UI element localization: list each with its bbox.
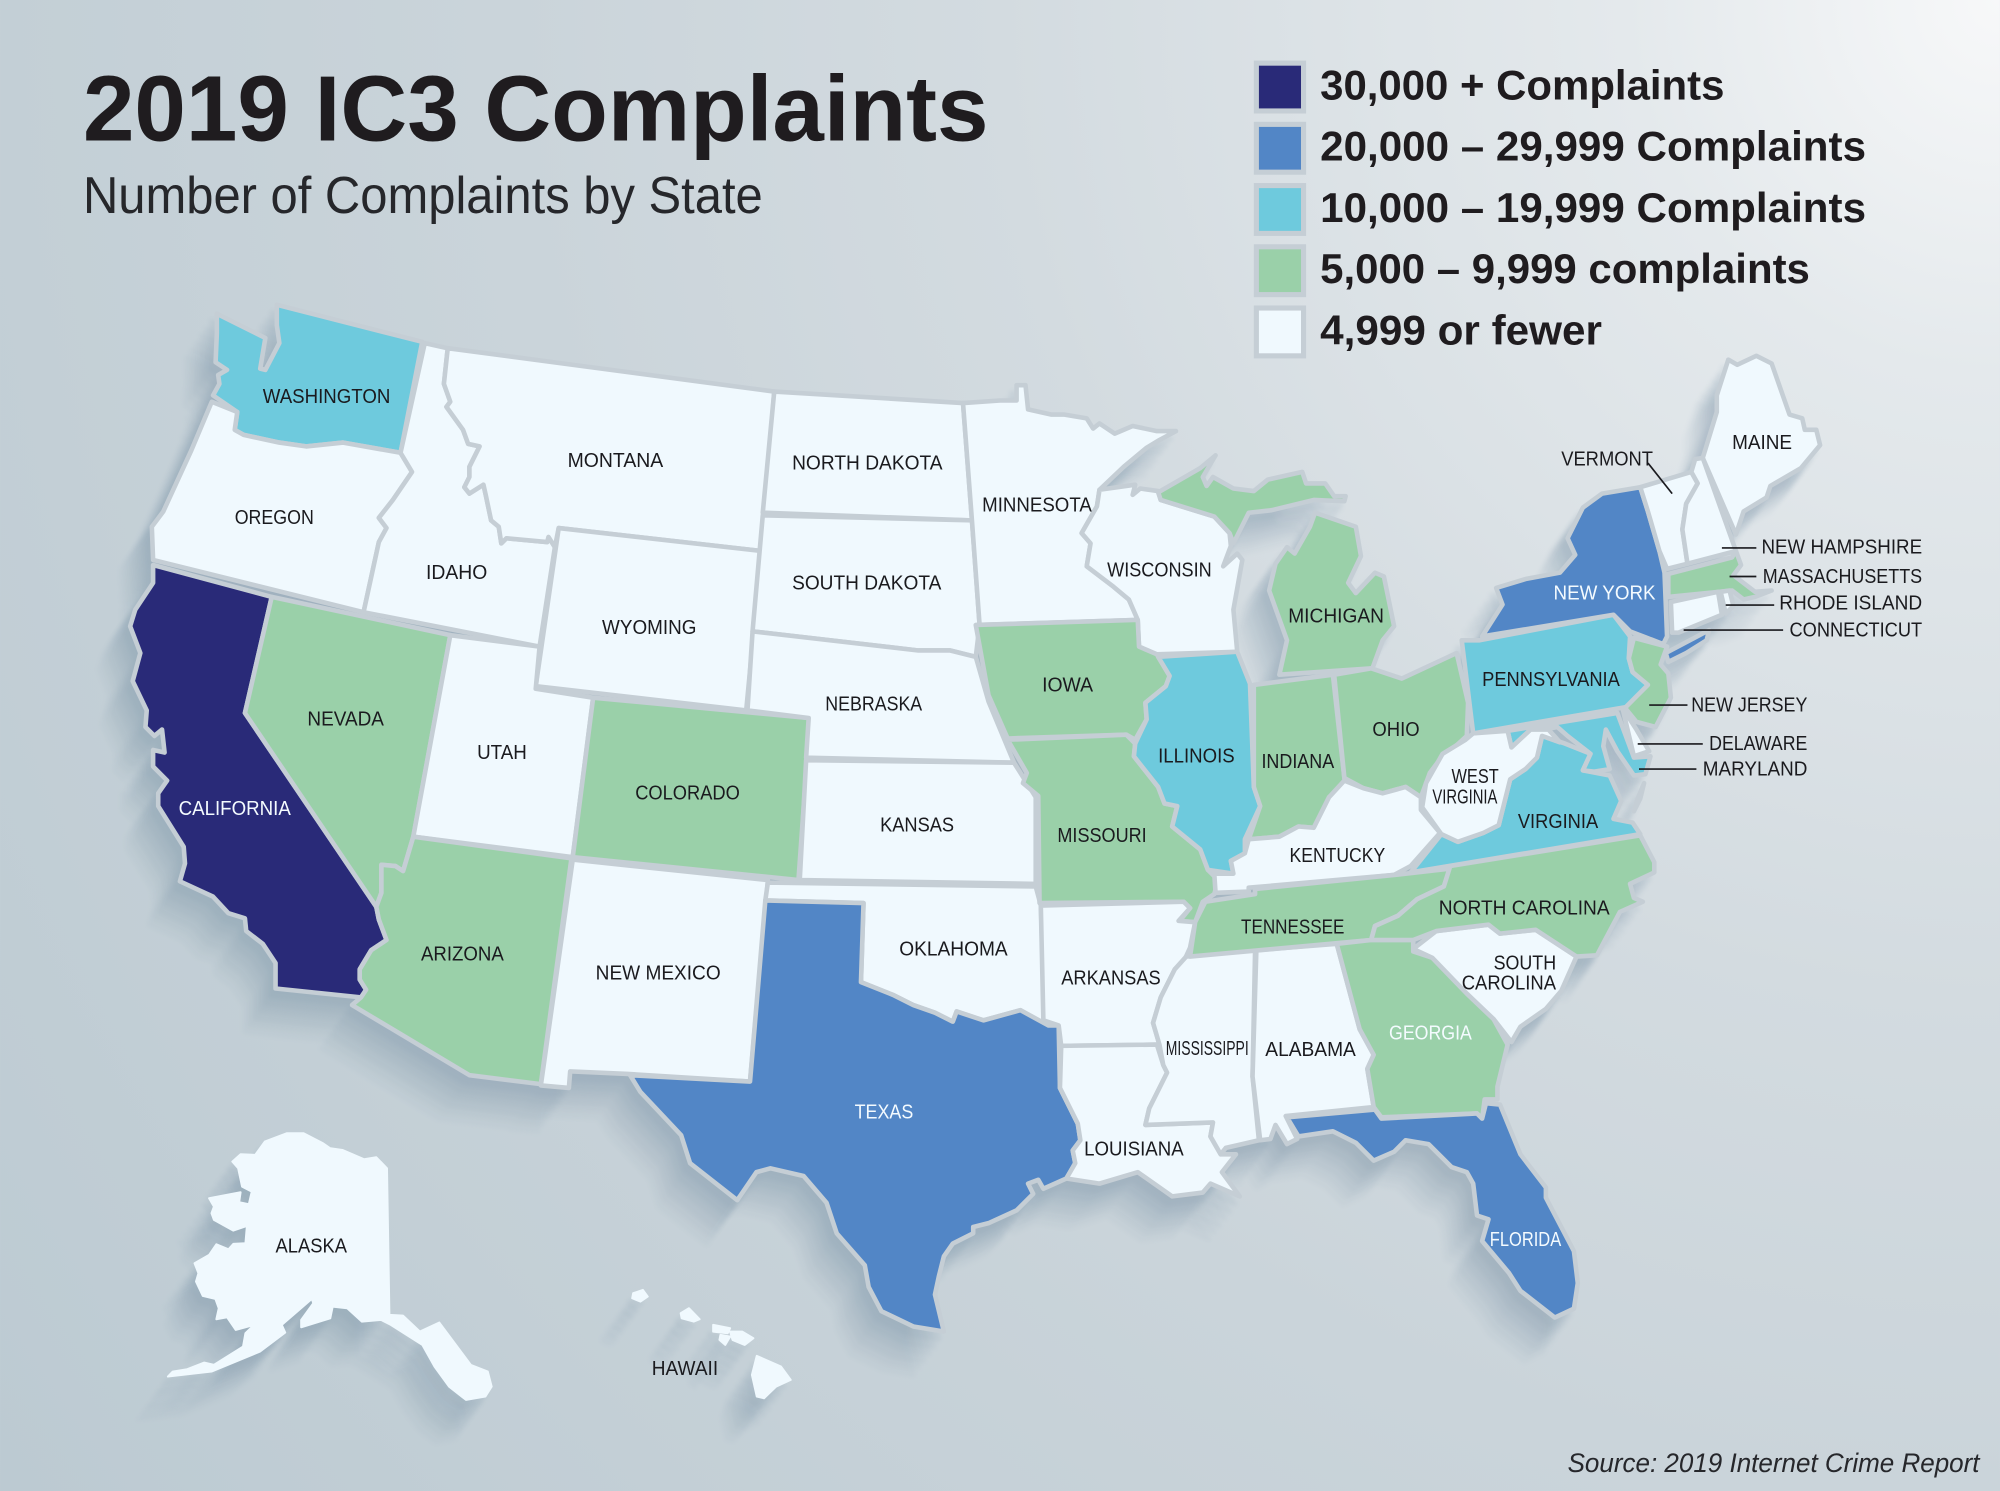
state name labels: VIRGINIA	[1518, 811, 1599, 833]
state: Delaware	[1622, 708, 1649, 756]
state: Pennsylvania	[1462, 615, 1648, 733]
state name labels: DELAWARE	[1709, 733, 1807, 755]
state: South Carolina	[1413, 925, 1577, 1042]
state: North Carolina	[1371, 835, 1654, 957]
state name labels: VERMONT	[1561, 449, 1653, 471]
state name labels: WEST	[1452, 766, 1499, 788]
state: Ohio	[1334, 653, 1468, 797]
state: Wisconsin	[1082, 485, 1242, 654]
state name labels: SOUTH	[1494, 952, 1556, 974]
legend label: 5,000-9,999: 5,000 – 9,999 complaints	[1320, 245, 1810, 292]
state: Virginia eastern shore	[1634, 783, 1644, 811]
state: Maine	[1703, 356, 1820, 534]
state: New Jersey	[1625, 638, 1671, 727]
subtitle: Number of Complaints by State	[83, 167, 763, 225]
state: Nebraska	[747, 631, 1014, 763]
state name labels: COLORADO	[635, 783, 740, 805]
state name labels: TEXAS	[855, 1102, 913, 1124]
state name labels	[179, 386, 1922, 1380]
state name labels: KANSAS	[880, 815, 954, 837]
contiguous states	[130, 305, 1820, 1332]
legend swatch: 10,000-19,999	[1256, 186, 1304, 233]
leader lines for northeast states	[1638, 463, 1783, 769]
legend label: 30,000+: 30,000 + Complaints	[1320, 61, 1724, 108]
legend	[1256, 61, 1866, 356]
state name labels: MINNESOTA	[982, 494, 1092, 516]
state: Texas	[630, 900, 1080, 1332]
state name labels: TENNESSEE	[1241, 917, 1344, 939]
state: Alaska	[168, 1133, 492, 1400]
state name labels: MICHIGAN	[1288, 605, 1384, 627]
state: West Virginia	[1422, 730, 1560, 842]
state name labels: OREGON	[235, 507, 314, 529]
state: Iowa	[976, 620, 1170, 740]
state: Michigan lower peninsula	[1269, 513, 1394, 675]
source note: Source: 2019 Internet Crime Report	[1568, 1448, 1981, 1478]
state name labels: MASSACHUSETTS	[1763, 566, 1922, 588]
state name labels: MISSOURI	[1057, 825, 1147, 847]
state name labels: CONNECTICUT	[1790, 619, 1922, 641]
state name labels: NEW MEXICO	[596, 963, 721, 985]
state: Massachusetts	[1668, 551, 1772, 599]
state: Kentucky	[1214, 781, 1440, 893]
state: South Dakota	[753, 515, 980, 657]
state: New Mexico	[541, 860, 768, 1088]
state name labels: ARIZONA	[421, 943, 504, 965]
state name labels: OKLAHOMA	[899, 938, 1008, 960]
state name labels: ALASKA	[276, 1235, 347, 1257]
state name labels: ILLINOIS	[1158, 746, 1235, 768]
state name labels: PENNSYLVANIA	[1482, 669, 1620, 691]
state: Oregon	[152, 402, 412, 612]
state: Oklahoma	[765, 883, 1045, 1025]
state: New Hampshire	[1682, 458, 1736, 564]
state: Nevada	[245, 597, 450, 907]
state name labels: KENTUCKY	[1290, 845, 1386, 867]
title: 2019 IC3 Complaints	[83, 56, 989, 160]
state: New York, Long Island	[1666, 630, 1709, 662]
state name labels: WISCONSIN	[1107, 560, 1212, 582]
state: Utah	[413, 635, 593, 857]
state: Michigan upper peninsula	[1158, 455, 1346, 543]
state name labels: MISSISSIPPI	[1166, 1038, 1249, 1060]
state name labels: INDIANA	[1261, 751, 1335, 773]
state name labels: NEW HAMPSHIRE	[1761, 537, 1922, 559]
state: Missouri	[1008, 735, 1218, 922]
state name labels: UTAH	[477, 742, 527, 764]
legend swatch: 20,000-29,999	[1256, 124, 1304, 172]
state name labels: WYOMING	[602, 617, 696, 639]
state: Washington	[213, 305, 422, 453]
state name labels: CALIFORNIA	[179, 798, 291, 820]
legend swatch: 4,999 or fewer	[1256, 308, 1304, 356]
state: Wyoming	[536, 528, 761, 710]
state: Minnesota	[963, 385, 1176, 625]
state: Illinois	[1134, 652, 1260, 874]
legend label: 4,999 or fewer: 4,999 or fewer	[1320, 306, 1602, 353]
state name labels: MARYLAND	[1703, 758, 1807, 780]
state name labels: NEVADA	[307, 709, 384, 731]
state name labels: SOUTH DAKOTA	[792, 572, 942, 594]
state: Vermont	[1640, 472, 1698, 569]
long map shadows	[100, 312, 1815, 1443]
map of states	[130, 305, 1820, 1400]
state: Arkansas	[1041, 902, 1195, 1046]
state name labels: RHODE ISLAND	[1779, 593, 1922, 615]
state: Alabama	[1253, 944, 1374, 1144]
legend label: 20,000-29,999: 20,000 – 29,999 Complaints	[1320, 123, 1866, 170]
state name labels: CAROLINA	[1462, 973, 1556, 995]
state name labels: NEBRASKA	[825, 693, 923, 715]
state name labels: ARKANSAS	[1061, 968, 1161, 990]
state name labels: NEW JERSEY	[1691, 695, 1808, 717]
state: Hawaii	[632, 1290, 791, 1398]
state name labels: NORTH CAROLINA	[1439, 897, 1610, 919]
state: Idaho	[364, 343, 555, 647]
state: Connecticut	[1671, 592, 1722, 633]
state: Mississippi	[1145, 950, 1259, 1154]
state name labels: LOUISIANA	[1084, 1139, 1184, 1161]
state name labels: NORTH DAKOTA	[792, 452, 943, 474]
state: California	[130, 565, 387, 997]
state name labels: WASHINGTON	[263, 386, 390, 408]
state: Rhode Island	[1721, 591, 1733, 613]
state name labels: NEW YORK	[1554, 582, 1656, 604]
state name labels: IOWA	[1042, 674, 1093, 696]
legend label: 10,000-19,999: 10,000 – 19,999 Complaints	[1320, 184, 1866, 231]
state: Virginia	[1411, 736, 1640, 872]
legend swatch: 30,000+	[1256, 63, 1304, 111]
state: Indiana	[1249, 675, 1346, 839]
state name labels: IDAHO	[426, 562, 487, 584]
state: Louisiana	[1060, 1045, 1240, 1196]
state name labels: OHIO	[1372, 719, 1420, 741]
state name labels: MAINE	[1732, 432, 1792, 454]
state: North Dakota	[763, 392, 972, 520]
state name labels: FLORIDA	[1490, 1229, 1562, 1251]
state name labels: VIRGINIA	[1432, 787, 1498, 809]
state: Maryland	[1508, 713, 1650, 775]
state: Arizona	[352, 837, 571, 1084]
state: New York	[1482, 487, 1667, 644]
state: Kansas	[800, 760, 1036, 884]
state: Florida	[1287, 1103, 1578, 1318]
state name labels: GEORGIA	[1389, 1022, 1472, 1044]
state: Georgia	[1337, 940, 1508, 1119]
state: Tennessee	[1190, 869, 1450, 957]
state name labels: MONTANA	[568, 450, 664, 472]
legend swatch: 5,000-9,999	[1256, 247, 1304, 295]
state: Montana	[444, 348, 774, 551]
state: Colorado	[573, 698, 810, 880]
state name labels: ALABAMA	[1265, 1039, 1356, 1061]
state name labels: HAWAII	[652, 1358, 718, 1380]
